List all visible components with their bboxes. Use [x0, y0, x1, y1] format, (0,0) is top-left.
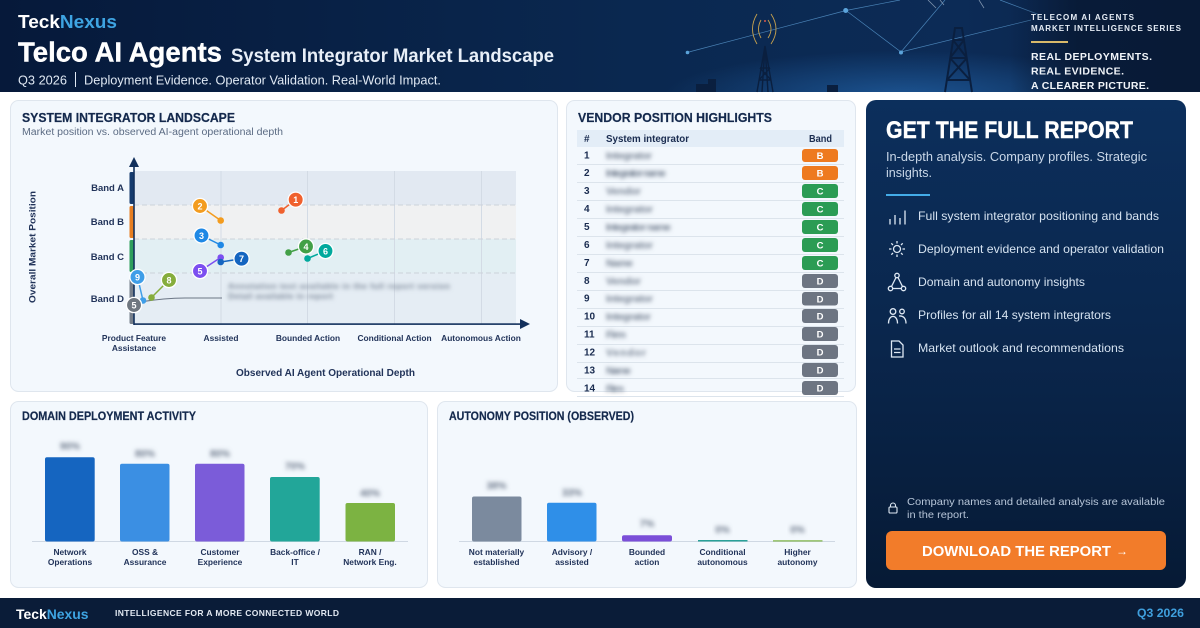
- row 7: C: [817, 258, 824, 270]
- band labels: Band A: [91, 183, 124, 194]
- bar: network operations: 90%: [60, 442, 80, 452]
- subtitle: System Integrator Market Landscape: [231, 45, 554, 67]
- marker 1: 1: [293, 195, 298, 205]
- row 8: [584, 274, 838, 288]
- row 14: Firm: [606, 383, 624, 395]
- title: Telco AI Agents: [18, 36, 222, 68]
- axis line: [459, 541, 835, 542]
- footer logo: TeckNexus: [16, 606, 89, 622]
- description: In-depth analysis. Company profiles. Strategic: [886, 150, 1147, 164]
- list item: market outlook: Market outlook and recommendations: [918, 341, 1124, 355]
- band labels: Band D: [91, 294, 124, 305]
- row 9: D: [817, 294, 824, 306]
- row 8: 8: [584, 276, 590, 287]
- row 13: D: [817, 366, 824, 376]
- row 11: Firm: [606, 329, 626, 341]
- bar: conditional autonomous: 0%: [715, 525, 730, 536]
- row 1: [584, 149, 838, 162]
- list item: domain insights: Domain and autonomy insights: [918, 275, 1085, 289]
- series statement: [1031, 51, 1152, 92]
- row 1: B: [817, 151, 824, 162]
- row 6: 6: [584, 240, 590, 251]
- marker 9: 9: [135, 272, 140, 282]
- row 14: 14: [584, 384, 596, 394]
- marker 4: 4: [303, 242, 309, 252]
- skyline blocks: [696, 79, 838, 92]
- lock note: [889, 496, 1165, 521]
- marker 2: 2: [197, 201, 203, 211]
- row 5: Integrator name: [606, 222, 671, 234]
- list item: positioning: Full system integrator positioning and bands: [918, 209, 1159, 223]
- blurred annotation: Detail available in report: [228, 291, 333, 301]
- table header: System integrator: [606, 134, 689, 145]
- bar: customer experience: Experience: [198, 557, 243, 567]
- bar: network operations: [45, 442, 95, 567]
- bar: not materially established: [469, 481, 525, 567]
- bar: oss and assurance: Assurance: [124, 557, 167, 567]
- panel: vendor position highlights: [566, 100, 856, 396]
- x axis labels: Conditional Action: [357, 333, 432, 343]
- row 7: Name: [606, 258, 633, 270]
- band labels: Band B: [91, 217, 124, 228]
- heading: AUTONOMY POSITION (OBSERVED): [449, 411, 634, 423]
- row 10: D: [817, 312, 824, 322]
- panel: system integrator landscape: [10, 100, 558, 392]
- panel: domain deployment activity: [10, 402, 428, 588]
- panel: get the full report: [866, 100, 1186, 588]
- lock note: Company names and detailed analysis are available: [907, 496, 1165, 508]
- y axis title: Overall Market Position: [28, 191, 38, 303]
- bar: conditional autonomous: Conditional: [699, 547, 746, 557]
- x axis labels: Assisted: [204, 333, 238, 343]
- marker 8: 8: [166, 275, 172, 285]
- gold divider: [1031, 41, 1068, 43]
- marker 3: 3: [199, 231, 204, 241]
- marker 3: [194, 228, 224, 248]
- row 13: Name: [606, 365, 631, 377]
- row 5: C: [817, 222, 824, 234]
- bar: network operations: Operations: [48, 557, 92, 567]
- bar: advisory: Advisory /: [552, 547, 593, 557]
- footer date: Q3 2026: [1137, 606, 1184, 620]
- row 14: D: [817, 384, 824, 394]
- marker 8: [148, 272, 177, 301]
- heading: GET THE FULL REPORT: [886, 117, 1133, 144]
- marker 6: 6: [323, 246, 328, 256]
- row 4: [584, 202, 838, 216]
- bar: not materially established: established: [473, 557, 520, 567]
- panel subheading: Market position vs. observed AI-agent operational depth: [22, 127, 283, 138]
- axis line: [32, 541, 408, 542]
- row 11: [584, 327, 838, 341]
- bar: ran: 40%: [360, 488, 380, 500]
- lock note: in the report.: [907, 509, 969, 521]
- row separators: [577, 164, 844, 396]
- x axis labels: Autonomous Action: [441, 333, 521, 343]
- row 13: 13: [584, 366, 596, 376]
- marker 2: [192, 198, 224, 224]
- table header: #: [584, 134, 590, 145]
- row 6: Integrator: [606, 240, 653, 252]
- bar: conditional autonomous: [697, 525, 748, 567]
- row 3: Vendor: [606, 186, 641, 198]
- bar: back-office: [270, 462, 321, 567]
- x axis arrow: [134, 319, 530, 329]
- row 1: Integrator: [606, 150, 652, 162]
- row 12: Vendor: [606, 347, 646, 359]
- row 3: 3: [584, 186, 590, 197]
- band labels: Band C: [91, 252, 124, 263]
- bar: bounded action: 7%: [640, 519, 654, 530]
- bar: advisory: 33%: [562, 488, 582, 499]
- row 1: 1: [584, 150, 590, 162]
- heading: VENDOR POSITION HIGHLIGHTS: [578, 111, 772, 125]
- icon: signal waves: [752, 14, 776, 44]
- bar: bounded action: [622, 519, 672, 567]
- row 7: [584, 256, 838, 270]
- icon: small signal tower: [757, 46, 773, 92]
- bar: oss and assurance: 80%: [135, 449, 155, 460]
- heading: DOMAIN DEPLOYMENT ACTIVITY: [22, 411, 196, 423]
- row 5: [584, 220, 838, 234]
- row 2: [584, 166, 838, 180]
- table header: Band: [809, 134, 832, 145]
- header banner: [0, 0, 1200, 92]
- row 11: 11: [584, 330, 595, 340]
- bar: customer experience: 80%: [210, 449, 230, 460]
- series label: [1031, 13, 1182, 33]
- bar: customer experience: Customer: [200, 547, 240, 557]
- row 8: Vendor: [606, 276, 641, 288]
- row 10: 10: [584, 312, 596, 322]
- row 12: D: [817, 348, 824, 358]
- bar: bounded action: action: [635, 557, 659, 567]
- bar: back-office: Back-office /: [270, 547, 321, 557]
- row 12: 12: [584, 348, 596, 358]
- x axis labels: Bounded Action: [276, 333, 340, 343]
- x axis labels: Product Feature: [102, 333, 166, 343]
- row 4: 4: [584, 204, 590, 215]
- footer tagline: INTELLIGENCE FOR A MORE CONNECTED WORLD: [115, 608, 339, 618]
- download button: [886, 531, 1166, 570]
- bar: higher autonomy: autonomy: [777, 557, 818, 567]
- bar: conditional autonomous: autonomous: [697, 557, 748, 567]
- download button: DOWNLOAD THE REPORT: [922, 544, 1111, 560]
- marker 7: 7: [239, 254, 244, 264]
- row 3: [584, 184, 838, 198]
- row 6: [584, 238, 838, 252]
- row 8: D: [817, 276, 824, 288]
- list item: deployment evidence: Deployment evidence and operator validation: [918, 242, 1164, 256]
- marker 7: [217, 251, 249, 266]
- table header: [577, 130, 844, 147]
- marker 5 grey: 5: [131, 300, 137, 310]
- row 5: 5: [584, 222, 590, 233]
- blurred annotation: [228, 281, 450, 301]
- marker 5 purple: [192, 254, 224, 279]
- tagline: Deployment Evidence. Operator Validation. Real-World Impact.: [84, 74, 441, 88]
- series statement: REAL EVIDENCE.: [1031, 66, 1124, 78]
- tagline: Q3 2026: [18, 74, 67, 88]
- row 4: Integrator: [606, 204, 653, 216]
- x axis labels: [102, 333, 521, 353]
- heading: SYSTEM INTEGRATOR LANDSCAPE: [22, 111, 235, 125]
- bar: network operations: Network: [53, 547, 87, 557]
- bar: back-office: IT: [291, 557, 300, 567]
- marker 4: [285, 239, 314, 256]
- bar: ran: RAN /: [359, 547, 382, 557]
- bar: bounded action: Bounded: [629, 547, 665, 557]
- bar: oss and assurance: OSS &: [132, 547, 158, 557]
- x axis labels: Assistance: [112, 343, 156, 353]
- bar: advisory: [547, 488, 596, 567]
- row 7: 7: [584, 258, 590, 269]
- bar: higher autonomy: [773, 525, 822, 567]
- row 2: Integrator name: [606, 168, 666, 180]
- row 2: B: [817, 168, 824, 180]
- series label: MARKET INTELLIGENCE SERIES: [1031, 24, 1182, 33]
- x axis title: Observed AI Agent Operational Depth: [236, 368, 415, 379]
- row 9: [584, 292, 838, 306]
- bar: customer experience: [195, 449, 244, 567]
- row 13: [584, 363, 838, 377]
- annotation leader: [140, 298, 222, 302]
- row 9: Integrator: [606, 293, 653, 305]
- band scale: [130, 172, 134, 324]
- row 14: [584, 381, 838, 395]
- bar: oss and assurance: [120, 449, 170, 567]
- blurred annotation: Annotation text available in the full report version: [228, 281, 450, 291]
- row 4: C: [817, 204, 824, 216]
- list item: domain insights: [888, 273, 1085, 291]
- plot background: [134, 171, 516, 324]
- series label: TELECOM AI AGENTS: [1031, 13, 1135, 22]
- network nodes: [686, 8, 903, 54]
- band labels: [91, 183, 124, 305]
- row 10: Integrator: [606, 311, 651, 323]
- series statement: REAL DEPLOYMENTS.: [1031, 51, 1152, 63]
- row 3: C: [817, 186, 824, 198]
- marker 5 grey: [126, 297, 142, 313]
- bar: back-office: 70%: [285, 462, 305, 472]
- logo: TeckNexus: [18, 11, 117, 32]
- marker 5 purple: 5: [197, 266, 203, 276]
- bar: ran: [343, 488, 397, 567]
- row 12: [584, 345, 838, 359]
- row 9: 9: [584, 294, 590, 304]
- marker 6: [304, 243, 333, 262]
- bar: advisory: assisted: [555, 557, 589, 567]
- series statement: A CLEARER PICTURE.: [1031, 80, 1149, 92]
- y axis arrow: [129, 157, 139, 325]
- bar: not materially established: 38%: [486, 481, 507, 492]
- accent line: [886, 194, 930, 196]
- description: insights.: [886, 166, 932, 180]
- icon: tower antenna arcs: [928, 0, 984, 8]
- panel: autonomy position: [438, 402, 856, 588]
- network lines illustration: [687, 0, 1040, 52]
- row 10: [584, 309, 838, 323]
- bar: higher autonomy: Higher: [784, 547, 811, 557]
- bar: higher autonomy: 0%: [790, 525, 805, 536]
- marker 1: [278, 192, 303, 214]
- list item: profiles: Profiles for all 14 system integrators: [918, 308, 1111, 322]
- bar: not materially established: Not materially: [469, 547, 525, 557]
- download button: →: [1116, 544, 1128, 558]
- row 2: 2: [584, 168, 590, 179]
- footer: [0, 598, 1200, 628]
- row 6: C: [817, 240, 824, 252]
- marker 9: [130, 269, 146, 304]
- row 11: D: [817, 330, 824, 340]
- bar: ran: Network Eng.: [343, 557, 397, 567]
- description: [886, 150, 1147, 180]
- icon: large transmission tower: [945, 28, 972, 92]
